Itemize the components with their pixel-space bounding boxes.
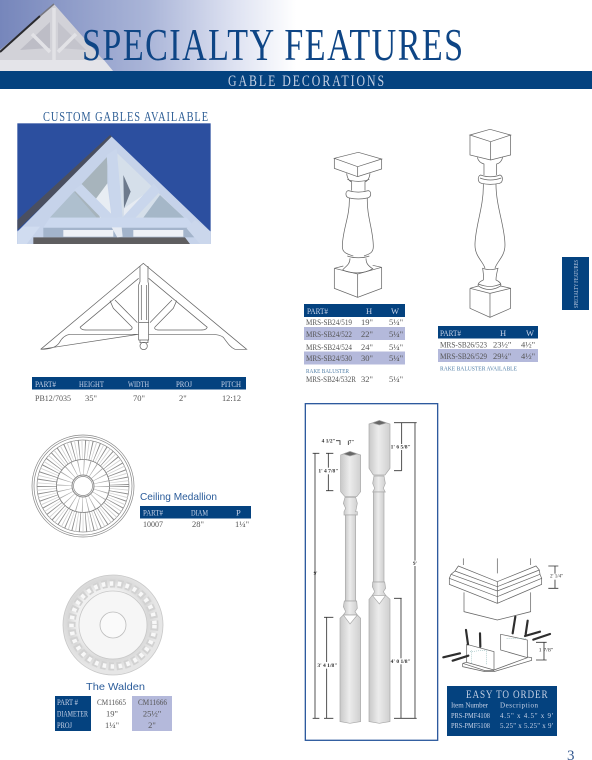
column wrap drawing	[449, 558, 542, 620]
baluster table 1: H	[366, 306, 372, 316]
medallion table: 28"	[192, 519, 204, 529]
walden table: PART #	[57, 697, 79, 707]
mounting bracket plates	[463, 634, 532, 672]
section band: GABLE DECORATIONS	[228, 72, 384, 91]
ceiling medallion label: Ceiling Medallion	[140, 491, 217, 503]
baluster table 1: MRS-SB24/524	[306, 342, 353, 352]
baluster drawing 2	[470, 129, 511, 317]
gable spec table: 35"	[85, 393, 97, 403]
baluster table 2: MRS-SB26/523	[440, 340, 487, 350]
right newel post	[369, 420, 390, 723]
side tab	[562, 257, 589, 310]
gable spec table: PB12/7035	[35, 393, 71, 403]
medallion table: P	[236, 508, 241, 518]
baluster table 1: 5¼"	[389, 374, 403, 384]
newel dimension labels: 4 1/2"	[322, 440, 336, 445]
medallion table: DIAM	[191, 508, 208, 518]
newel dimension labels: 9'	[314, 572, 318, 577]
newel dimension lines	[313, 423, 417, 718]
custom gables heading: CUSTOM GABLES AVAILABLE	[43, 108, 208, 124]
walden table: 2"	[148, 720, 156, 730]
medallion table: 1¼"	[235, 519, 249, 529]
baluster table 1: 19"	[361, 317, 373, 327]
bracket dimension labels	[539, 574, 563, 654]
baluster table 1: 32"	[361, 374, 373, 384]
gable spec table: 12:12	[222, 393, 241, 403]
baluster drawing 1	[334, 152, 382, 297]
mounting bolts	[443, 617, 550, 661]
easy to order box: PRS-PMF4108	[451, 712, 490, 720]
column wrap and mounting bracket	[443, 558, 563, 672]
baluster table 2: H	[500, 328, 506, 338]
baluster table 2: 4½"	[521, 340, 535, 350]
bracket dimension labels: 1 7/8"	[539, 649, 553, 654]
baluster table 2: RAKE BALUSTER AVAILABLE	[440, 366, 517, 372]
newel dimension labels: 9'	[413, 562, 417, 567]
baluster table 2: W	[526, 328, 534, 338]
baluster table 2: PART#	[440, 328, 462, 338]
side tab: SPECIALTY FEATURES	[574, 260, 580, 308]
newel dimension labels	[314, 440, 418, 669]
medallion table	[140, 506, 251, 529]
walden table: CM11666	[138, 697, 167, 707]
baluster table 1: MRS-SB24/532R	[306, 374, 356, 384]
gable line drawing	[41, 263, 247, 350]
baluster table 1: 5¼"	[389, 317, 403, 327]
medallion table: PART#	[143, 508, 164, 518]
newel post panel	[305, 404, 438, 740]
header banner	[0, 0, 463, 71]
medallion table: 10007	[143, 519, 163, 529]
gable spec table	[32, 377, 246, 403]
baluster table 1: MRS-SB24/530	[306, 353, 352, 363]
baluster table 1: 5¼"	[389, 329, 403, 339]
header gable image	[0, 4, 113, 71]
baluster table 2: 23½"	[493, 340, 511, 350]
newel dimension labels: 1' 4 7/8"	[318, 470, 339, 475]
gable spec table: PITCH	[221, 379, 241, 389]
baluster table 2: 29¼"	[493, 351, 511, 361]
ceiling medallion drawing	[32, 435, 134, 537]
easy to order box: Description	[500, 702, 538, 710]
walden table	[55, 696, 172, 731]
walden table: 25½"	[143, 708, 161, 718]
baluster table 2	[438, 326, 538, 372]
gable photo	[17, 123, 211, 244]
baluster table 1: 22"	[361, 329, 373, 339]
newel dimension labels: 1' 6 5/8"	[391, 446, 411, 451]
baluster table 1: MRS-SB24/519	[306, 317, 352, 327]
baluster table 1: 5¼"	[389, 342, 403, 352]
baluster table 2: 4½"	[521, 351, 535, 361]
easy to order box: 5.25" x 5.25" x 9'	[500, 722, 553, 730]
easy to order box: 4.5" x 4.5" x 9'	[500, 712, 553, 720]
easy to order box: EASY TO ORDER	[466, 689, 548, 701]
bracket dimension labels: 2' 1/4"	[550, 575, 563, 580]
walden table: 1¼"	[105, 720, 119, 730]
walden label: The Walden	[86, 681, 145, 693]
easy to order box	[447, 686, 557, 736]
baluster table 1: 5¼"	[389, 353, 403, 363]
newel dimension labels: 7"	[349, 440, 354, 445]
newel dimension labels: 4' 0 1/8"	[391, 660, 411, 665]
gable spec table: WIDTH	[128, 379, 149, 389]
baluster table 1	[304, 304, 405, 384]
left newel post	[340, 451, 361, 723]
gable spec table: 70"	[133, 393, 145, 403]
walden medallion	[63, 575, 163, 675]
gable spec table: 2"	[179, 393, 187, 403]
main title: SPECIALTY FEATURES	[82, 19, 463, 70]
gable spec table: PROJ	[176, 379, 193, 389]
baluster table 1: RAKE BALUSTER	[306, 368, 350, 375]
gable spec table: HEIGHT	[79, 379, 105, 389]
walden table: CM11665	[97, 697, 126, 707]
baluster table 1: MRS-SB24/522	[306, 329, 352, 339]
walden table: 19"	[106, 708, 118, 718]
baluster table 1: PART#	[307, 306, 329, 316]
newel dimension labels: 3' 4 1/8"	[317, 664, 338, 669]
easy to order box: Item Number	[451, 702, 489, 710]
easy to order box: PRS-PMF5108	[451, 722, 490, 730]
bracket dimensions	[536, 566, 558, 660]
baluster table 1: 24"	[361, 342, 373, 352]
baluster table 2: MRS-SB26/529	[440, 351, 487, 361]
gable spec table: PART#	[35, 379, 57, 389]
baluster table 1: W	[391, 306, 399, 316]
section band	[0, 71, 592, 91]
walden table: DIAMETER	[57, 708, 88, 718]
baluster table 1: 30"	[361, 353, 373, 363]
walden table: PROJ	[57, 720, 73, 730]
